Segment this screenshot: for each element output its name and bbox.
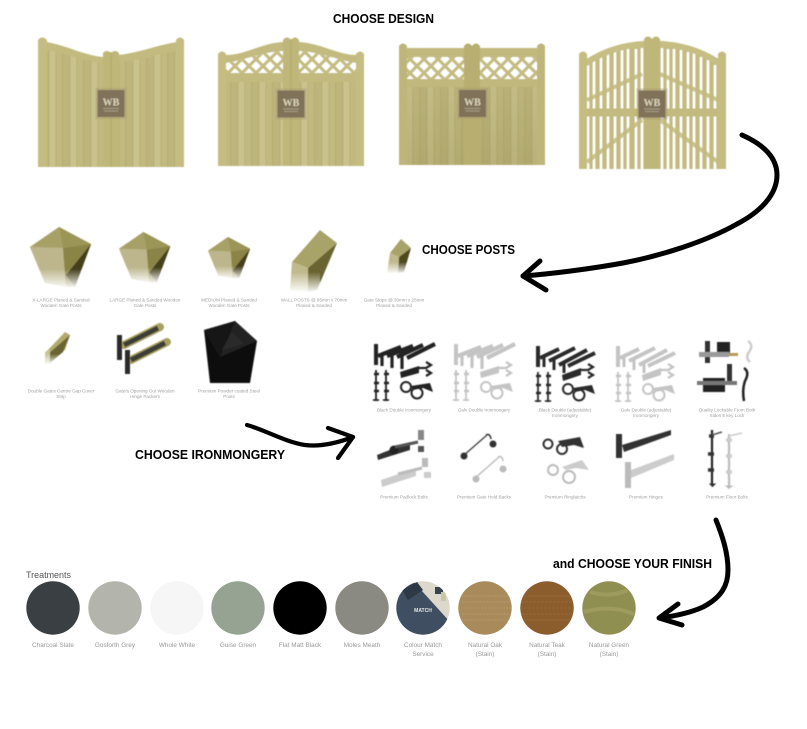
swatch: charcoal slate: [26, 581, 80, 635]
heading: choose design: CHOOSE DESIGN: [333, 12, 434, 26]
arrow: posts to ironmongery: [247, 425, 353, 458]
captions: treatment swatches: Natural Green: [589, 642, 630, 649]
captions: posts: Gate/s Opening Out Wooden: [115, 388, 175, 394]
captions: posts: Premium Powder coated Steel: [198, 388, 260, 394]
captions: treatment swatches: Natural Oak: [468, 642, 503, 649]
post: medium: [207, 237, 251, 280]
post: hinge packers: [117, 327, 167, 374]
captions: posts: MEDIUM Planed & Sanded: [201, 298, 257, 302]
captions: posts: Wooden Gate Posts: [40, 303, 82, 308]
gate 3: square top lattice: [399, 44, 545, 165]
item: ring latches: [544, 437, 589, 483]
swatch: natural teak: [520, 581, 574, 635]
item: floor bolts: [708, 430, 742, 488]
captions: ironmongery: Galv Double (adjustable): [621, 408, 672, 412]
panel: posts: [29, 227, 411, 383]
captions: ironmongery: Galv Double Ironmongery: [458, 408, 511, 412]
captions: treatment swatches: Natural Teak: [529, 642, 566, 649]
gate 2: swan neck lattice: [218, 38, 364, 166]
captions: treatment swatches: Guise Green: [220, 642, 257, 649]
arrow: ironmongery to finish: [659, 520, 728, 625]
swatch: whole white: [150, 581, 204, 635]
item: galv double ironmongery: [452, 344, 515, 401]
captions: treatment swatches: Charcoal Slate: [32, 642, 74, 649]
swatch: gosforth grey: [88, 581, 142, 635]
item: galv double adjustable: [614, 346, 675, 402]
captions: ironmongery: Premium Padlock Bolts: [380, 494, 428, 500]
captions: treatment swatches: Colour Match: [404, 642, 442, 649]
captions: treatment swatches: Service: [412, 651, 434, 658]
captions: ironmongery: Black Double (adjustable): [539, 408, 592, 412]
post: x-large: [29, 227, 93, 289]
captions: posts: LARGE Planed & Sanded Wooden: [110, 298, 181, 302]
captions: treatment swatches: Moles Meath: [344, 642, 381, 649]
captions: ironmongery: Premium Floor Bolts: [706, 494, 749, 500]
heading: choose your finish: and CHOOSE YOUR FINISH: [553, 557, 712, 571]
swatch: colour match service: MATCH: [414, 608, 432, 614]
captions: treatment swatches: Whole White: [159, 642, 196, 649]
gate 4: arched picket: [579, 36, 726, 169]
captions: treatment swatches: [32, 642, 630, 658]
captions: ironmongery: Ironmongery: [552, 413, 579, 418]
swatch: flat matt black: [273, 581, 327, 635]
captions: posts: Gate Stops @ 30mm x 25mm: [364, 298, 424, 302]
post: large: [118, 232, 172, 284]
captions: posts: [28, 298, 424, 399]
captions: treatment swatches: Gosforth Grey: [95, 642, 136, 649]
captions: ironmongery: Premium Ringlatchs: [544, 494, 586, 500]
captions: posts: Posts: [223, 394, 235, 399]
post: powder coated steel: [204, 321, 257, 383]
captions: posts: Strip: [56, 394, 66, 399]
captions: ironmongery: Premium Hinges: [629, 494, 664, 500]
captions: posts: Double Gates Centre Gap Cover: [28, 388, 95, 394]
captions: posts: WALL POSTS @ 95mm x 70mm: [281, 298, 347, 302]
panel: ironmongery: [372, 341, 751, 488]
arrow: design to posts: [523, 135, 777, 290]
item: padlock bolts: [377, 430, 431, 487]
captions: ironmongery: Ironmongery: [633, 413, 660, 418]
item: black double adjustable: [534, 346, 595, 402]
panel: gate designs: [38, 36, 726, 169]
heading: choose posts: CHOOSE POSTS: [422, 243, 515, 257]
panel: treatment swatches: [26, 580, 636, 640]
item: lockable key lock: [697, 341, 751, 401]
captions: ironmongery: Black Double Ironmongery: [377, 408, 432, 412]
item: black double ironmongery: [372, 344, 435, 401]
captions: posts: Planed & Sanded: [296, 303, 332, 308]
heading: treatments: Treatments: [26, 570, 72, 580]
swatch: guise green: [211, 581, 265, 635]
gate 1: swan neck solid: [38, 38, 184, 167]
captions: treatment swatches: (Stain): [476, 651, 494, 658]
captions: ironmongery: Sides 5 key Lock: [710, 413, 745, 418]
captions: treatment swatches: (Stain): [538, 651, 556, 658]
captions: treatment swatches: (Stain): [600, 651, 618, 658]
post: wall post: [288, 230, 337, 293]
captions: posts: Hinge Packers: [130, 394, 161, 399]
swatch: natural oak: [458, 581, 512, 635]
post: gate stop: [385, 239, 411, 274]
captions: ironmongery: [377, 408, 756, 500]
item: hinges: [616, 430, 674, 488]
captions: ironmongery: Quality Lockable From Both: [699, 408, 756, 412]
captions: posts: Wooden Gate Posts: [208, 303, 250, 308]
captions: treatment swatches: Flat Matt Black: [279, 642, 322, 649]
captions: posts: Planed & Sanded: [376, 303, 412, 308]
heading: choose ironmongery: CHOOSE IRONMONGERY: [135, 448, 286, 462]
post: centre gap cover strip: [44, 332, 70, 365]
captions: posts: Gate Posts: [134, 303, 157, 308]
swatch: colour match service: [396, 580, 450, 640]
swatch: natural green: [582, 581, 636, 635]
swatch: moles meath: [335, 581, 389, 635]
captions: posts: X-LARGE Planed & Sanded: [32, 298, 90, 302]
item: gate hold backs: [460, 434, 506, 482]
captions: ironmongery: Premium Gate Hold Backs: [457, 494, 512, 500]
